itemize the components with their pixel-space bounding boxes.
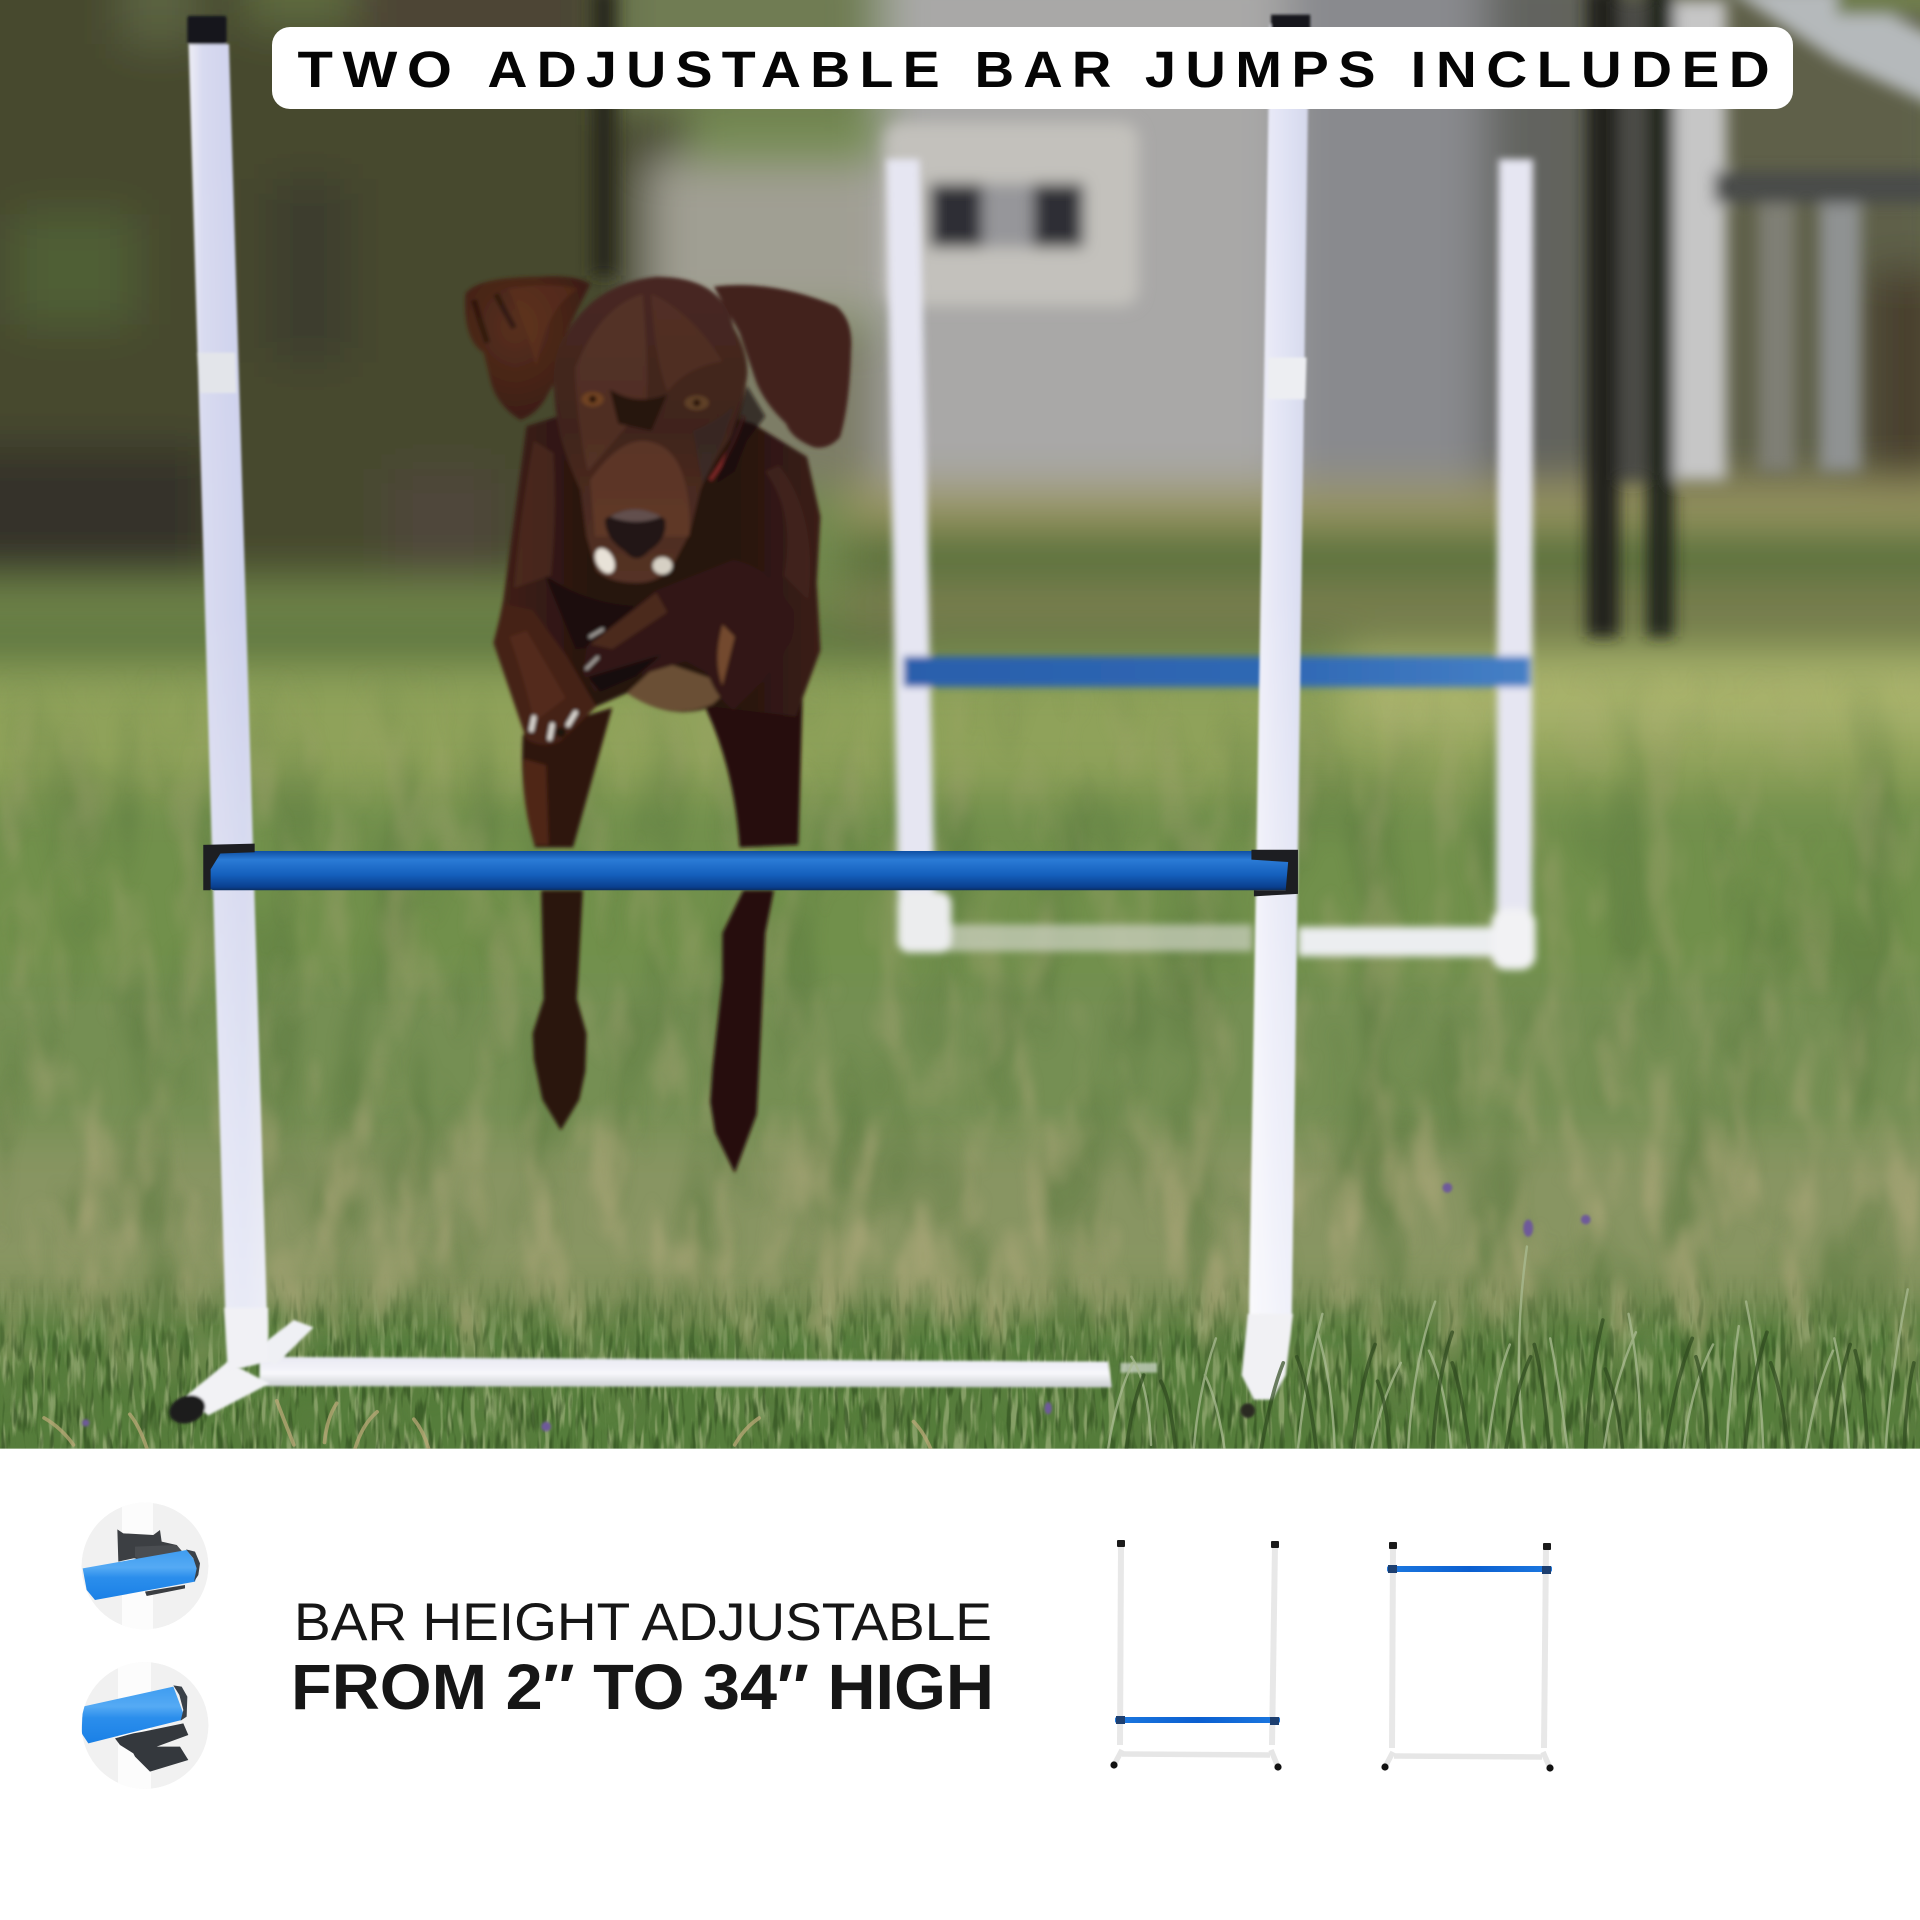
dog head: [554, 277, 747, 583]
dog eyes: [582, 392, 709, 410]
title text: BAR: [975, 40, 1120, 98]
title text: [298, 40, 1779, 98]
sharp foreground grass texture: [0, 1273, 1920, 1449]
dog hind legs: [522, 673, 803, 1173]
blurred yard background with house, fence and lawn: [0, 0, 1920, 1506]
title text: ADJUSTABLE: [487, 40, 949, 98]
line: bar height adjustable: BAR HEIGHT ADJUSTABLE: [294, 1593, 992, 1652]
brown dog in mid-jump: [465, 276, 851, 1173]
line: from 2 to 34 high: FROM 2″ TO 34″ HIGH: [291, 1651, 994, 1723]
title text: JUMPS: [1145, 40, 1385, 98]
dog red collar: [710, 416, 743, 480]
dog nose and teeth: [591, 509, 672, 577]
icon: bar clip at bottom position: [82, 1660, 208, 1790]
mini jump: high bar setting: [1381, 1542, 1554, 1772]
front left post: [187, 16, 268, 1371]
title text: INCLUDED: [1411, 40, 1779, 98]
bar height text: [291, 1593, 994, 1723]
dog right ear: [714, 285, 851, 448]
front jump base tubing: [165, 1320, 1157, 1428]
lawn texture: [0, 698, 1897, 1314]
front right post: [1240, 15, 1310, 1418]
title text: TWO: [298, 40, 462, 98]
dog left ear: [465, 276, 590, 420]
mini jump: low bar setting: [1110, 1540, 1282, 1771]
photo panel: dog jumping over bar in a yard: [0, 0, 1920, 1506]
front bar jump: [165, 15, 1310, 1428]
small purple flowers: [82, 1183, 1591, 1431]
blue crossbar with black clips: [203, 844, 1298, 896]
icon: bar clip at top position: [82, 1500, 208, 1630]
foreground grass blades and wildflowers: [44, 1183, 1914, 1449]
house trim and windows: [884, 122, 1139, 306]
dry grass streaks: [0, 766, 1920, 1383]
dog right foreleg folded: [583, 560, 794, 710]
dog left foreleg and paw: [493, 604, 596, 745]
dog body: [500, 416, 823, 718]
fence posts and roof edge: [591, 0, 1920, 637]
title banner: [272, 27, 1793, 109]
rear bar jump, out of focus: [887, 159, 1536, 970]
